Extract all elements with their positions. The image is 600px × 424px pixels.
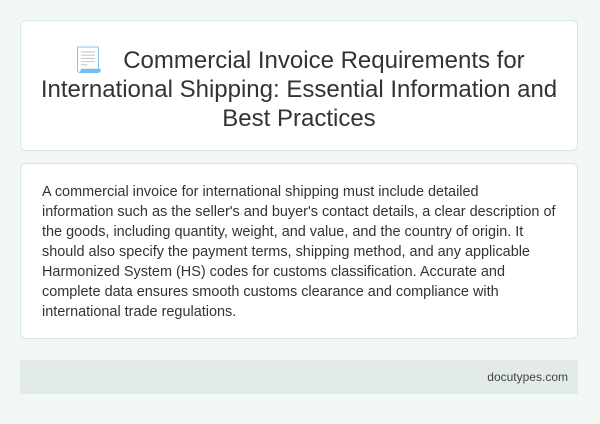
- text block: [42, 184, 556, 320]
- text block: A commercial invoice for international shipping must include detailed: [42, 184, 479, 200]
- text block: should also specify the payment terms, shipping method, and any applicable: [42, 244, 530, 260]
- footer text: docutypes.com: [487, 370, 568, 384]
- title: 📃 Commercial Invoice Requirements for: [73, 47, 525, 74]
- footer: [20, 360, 578, 394]
- text block: international trade regulations.: [42, 304, 236, 320]
- panel: description: [20, 163, 578, 339]
- title: International Shipping: Essential Information and: [41, 76, 557, 103]
- text block: Harmonized System (HS) codes for customs classification. Accurate and: [42, 264, 505, 280]
- text block: information such as the seller's and buyer's contact details, a clear description of: [42, 204, 556, 220]
- text block: the goods, including quantity, weight, and value, and the country of origin. It: [42, 224, 523, 240]
- title: [41, 46, 557, 132]
- text block: complete data ensures smooth customs clearance and compliance with: [42, 284, 499, 300]
- title: Best Practices: [222, 105, 376, 132]
- panel: title: [20, 20, 578, 151]
